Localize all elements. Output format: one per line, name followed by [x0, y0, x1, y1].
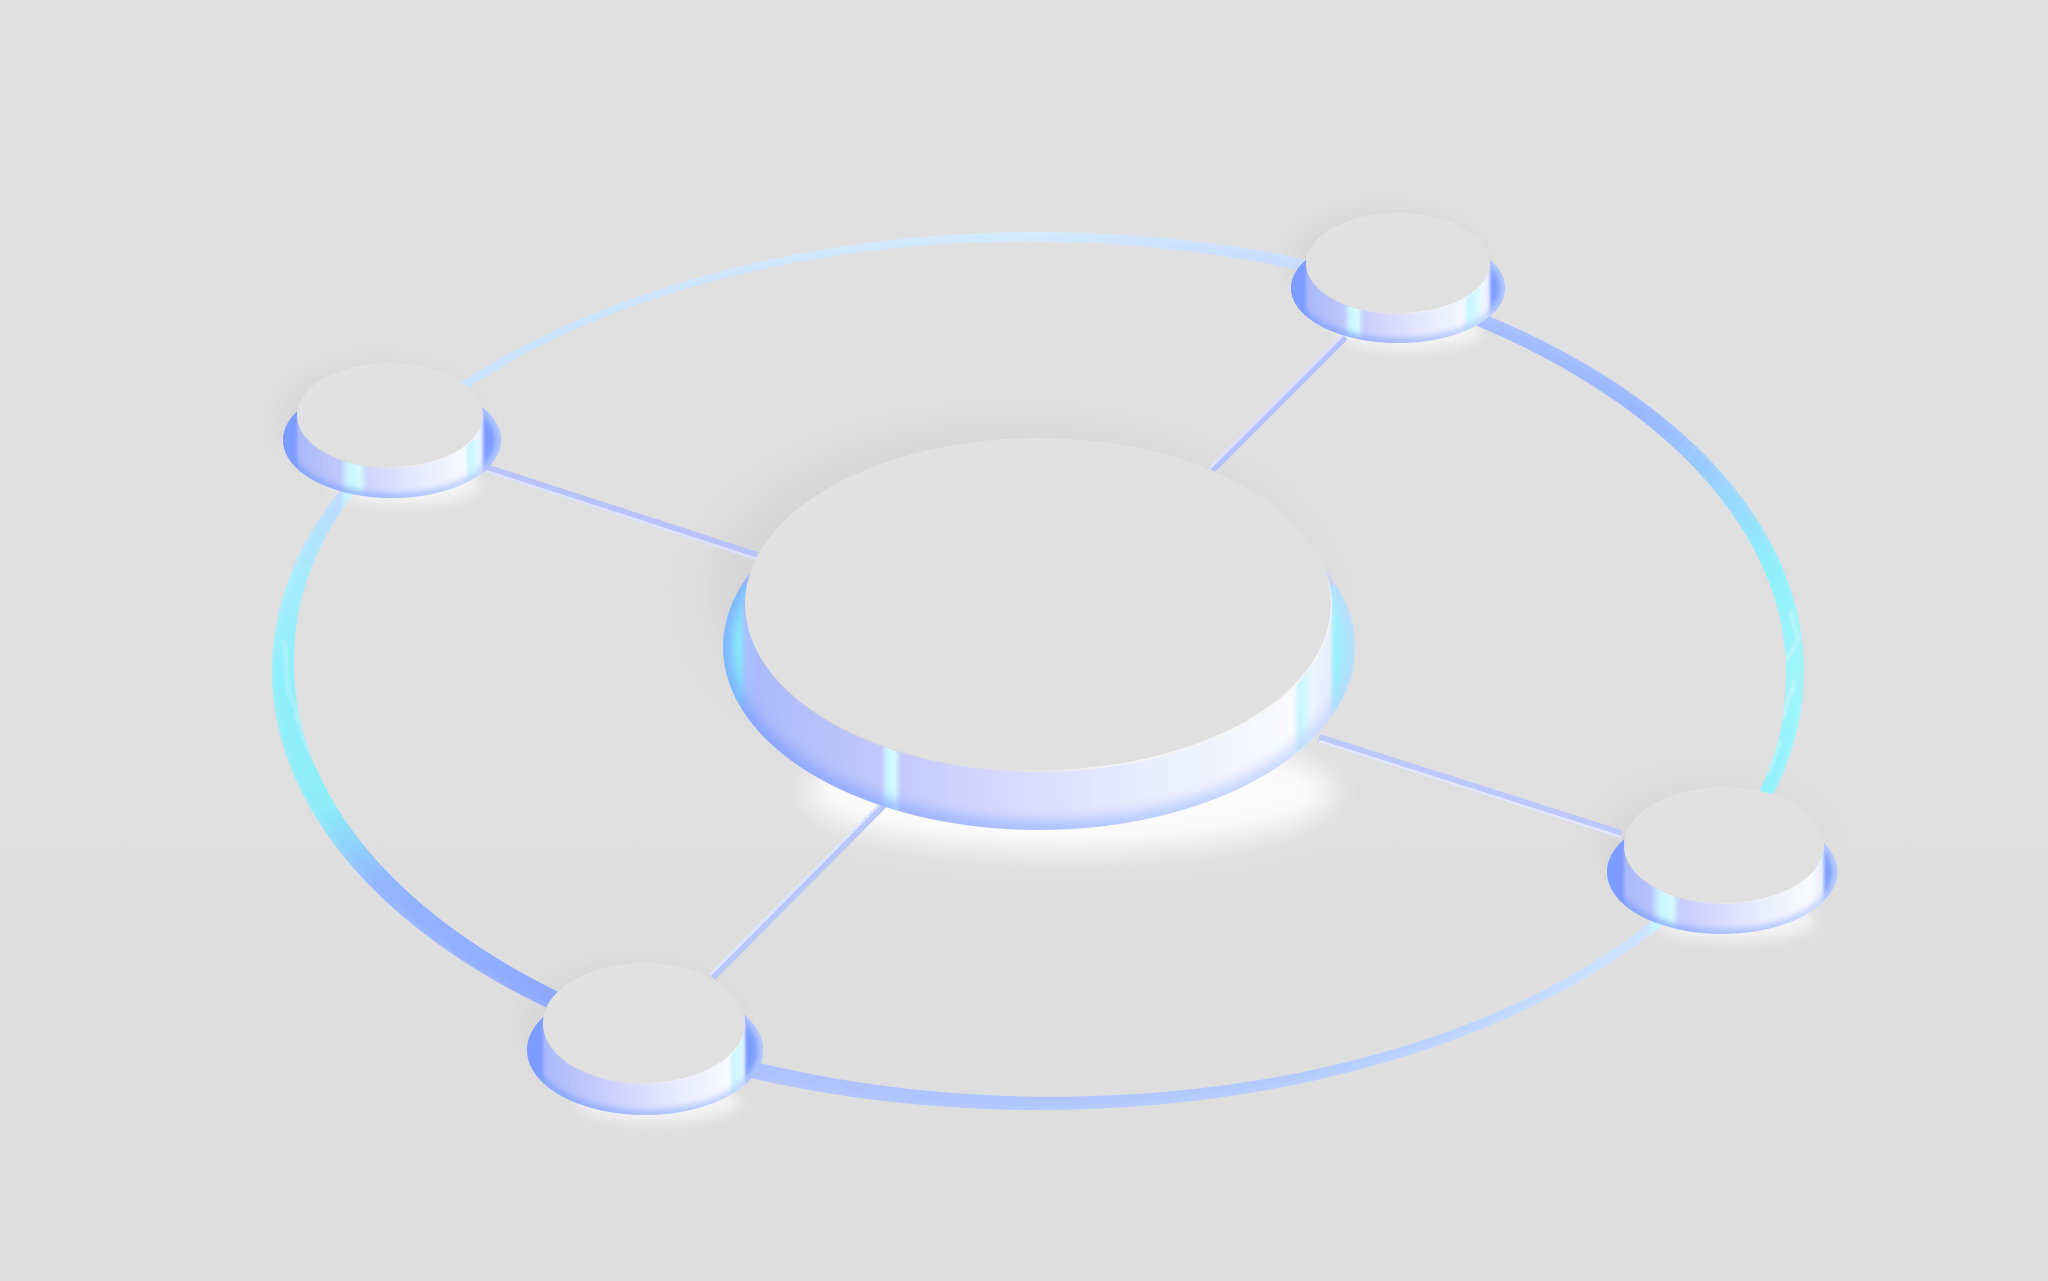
stripe continuing below top-left node — [342, 492, 352, 508]
bottom-left top face — [543, 963, 745, 1083]
bottom-left pit and wall — [527, 1014, 763, 1115]
top-right node disc — [1291, 214, 1505, 343]
connector groove: top-right node to hub — [1210, 335, 1345, 470]
hub top face — [745, 438, 1331, 770]
top-right pit and wall — [1291, 260, 1505, 343]
connector groove: hub to bottom-right node — [1319, 738, 1621, 837]
top-left pit and wall — [283, 407, 501, 498]
bottom-left node disc — [527, 966, 763, 1115]
hub rim — [746, 440, 1332, 772]
refraction streaks: right — [1768, 610, 1798, 775]
hub pit and wall — [723, 569, 1355, 830]
top-left top face — [297, 363, 483, 467]
bottom-left rim — [543, 964, 745, 1084]
bottom-right node disc — [1607, 790, 1837, 934]
central hub disc — [710, 438, 1368, 840]
refraction streaks: left — [283, 640, 312, 760]
top-right top face — [1306, 213, 1490, 313]
connector groove: hub to bottom-left node — [710, 801, 885, 977]
connector groove: top-left node to hub — [486, 468, 757, 559]
soft floor lighting around the discs — [278, 207, 1818, 1122]
top-left node disc — [283, 366, 501, 498]
top-right rim — [1306, 214, 1490, 314]
stripe continuing below bottom-right node — [1650, 922, 1662, 934]
bottom-right top face — [1624, 787, 1824, 903]
bottom-right pit and wall — [1607, 839, 1837, 934]
top-left rim — [297, 364, 483, 468]
outer ring groove — [272, 232, 1804, 1110]
bottom-right rim — [1624, 788, 1824, 904]
light along the outer edge of the groove — [272, 500, 1798, 1008]
